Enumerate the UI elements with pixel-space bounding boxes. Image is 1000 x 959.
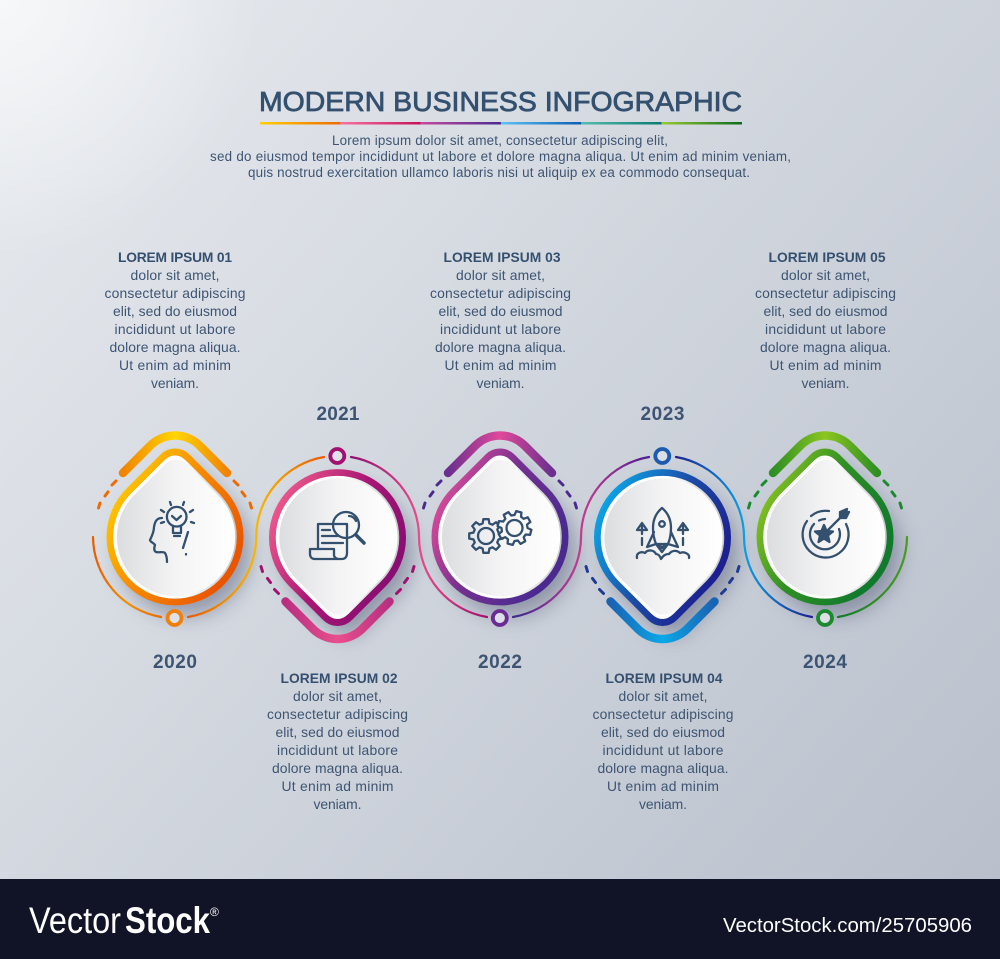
step 2: document search drop xyxy=(261,473,414,639)
footer logo: Vector xyxy=(29,900,121,941)
marker: 2022 node xyxy=(493,611,507,625)
step 4 ring xyxy=(598,473,728,622)
step 3 ring xyxy=(435,452,565,602)
title rainbow underline xyxy=(260,122,742,124)
intro text: sed do eiusmod tempor incididunt ut labore et dolore magna aliqua. Ut enim ad minim veniam, xyxy=(210,149,791,164)
step 5 dashes xyxy=(748,481,902,508)
text block: lorem ipsum 04: dolore magna aliqua. xyxy=(598,760,728,776)
step 2 ring xyxy=(272,473,402,622)
text block: lorem ipsum 01: consectetur adipiscing xyxy=(104,285,246,301)
text block: lorem ipsum 03: dolor sit amet, xyxy=(456,267,545,283)
step 5 top cap xyxy=(773,435,877,473)
step 4: rocket drop xyxy=(586,473,739,639)
text block: lorem ipsum 01: veniam. xyxy=(151,375,199,391)
step 2 bottom cap xyxy=(286,602,390,639)
text block: lorem ipsum 03: Ut enim ad minim xyxy=(444,357,556,373)
marker: 2021 node xyxy=(330,449,344,463)
text block: lorem ipsum 04: incididunt ut labore xyxy=(602,742,724,758)
text block: lorem ipsum 02: LOREM IPSUM 02 xyxy=(280,671,398,686)
step 4 bottom cap xyxy=(610,602,714,639)
step 5 plate xyxy=(763,456,887,599)
step 2 dashes xyxy=(261,566,414,594)
step 1 ring xyxy=(110,452,240,602)
step 1 dashes xyxy=(98,481,252,508)
text block: lorem ipsum 02: incididunt ut labore xyxy=(277,742,398,758)
text block: lorem ipsum 04: consectetur adipiscing xyxy=(592,706,734,722)
intro text xyxy=(210,133,791,180)
year 2023: 2023 xyxy=(640,404,684,425)
marker: 2023 node xyxy=(655,449,669,463)
text block: lorem ipsum 04 xyxy=(592,671,734,812)
footer logo: ® xyxy=(210,905,219,919)
text block: lorem ipsum 04: veniam. xyxy=(639,796,687,812)
step 3: gears drop xyxy=(424,435,576,602)
text block: lorem ipsum 01: incididunt ut labore xyxy=(114,321,236,337)
icon: document with magnifier xyxy=(310,512,364,559)
text block: lorem ipsum 05: veniam. xyxy=(802,375,850,391)
text block: lorem ipsum 01: dolor sit amet, xyxy=(130,267,220,283)
text block: lorem ipsum 01: elit, sed do eiusmod xyxy=(113,303,237,319)
text block: lorem ipsum 01: dolore magna aliqua. xyxy=(110,339,240,355)
icon: gears xyxy=(469,507,535,553)
text block: lorem ipsum 02: consectetur adipiscing xyxy=(267,706,408,722)
text block: lorem ipsum 04: elit, sed do eiusmod xyxy=(601,724,725,740)
footer logo xyxy=(29,900,219,941)
marker: 2024 node xyxy=(818,611,832,625)
text block: lorem ipsum 04: dolor sit amet, xyxy=(618,688,708,704)
text block: lorem ipsum 02 xyxy=(267,671,408,812)
year 2024: 2024 xyxy=(803,652,847,673)
text block: lorem ipsum 03: incididunt ut labore xyxy=(440,321,561,337)
step 4 shadow xyxy=(608,487,738,636)
step 3 top cap xyxy=(448,435,552,473)
text block: lorem ipsum 05: LOREM IPSUM 05 xyxy=(768,250,886,265)
step 3 dashes xyxy=(424,481,576,508)
text block: lorem ipsum 05 xyxy=(755,250,896,391)
step 1 plate xyxy=(113,456,237,599)
text block: lorem ipsum 02: veniam. xyxy=(314,796,362,812)
intro text: quis nostrud exercitation ullamco laboris nisi ut aliquip ex ea commodo consequat. xyxy=(248,165,750,180)
step 1 shadow xyxy=(120,466,250,616)
year 2022: 2022 xyxy=(478,652,522,673)
text block: lorem ipsum 02: dolore magna aliqua. xyxy=(272,760,403,776)
icon: target with arrow and star xyxy=(803,509,849,558)
text block: lorem ipsum 03: LOREM IPSUM 03 xyxy=(444,250,561,265)
step 2 plate xyxy=(276,476,399,618)
text block: lorem ipsum 01 xyxy=(104,250,246,391)
step 2 shadow xyxy=(282,487,412,636)
icon: rocket with clouds xyxy=(637,508,689,559)
step 5: target drop xyxy=(748,435,902,602)
text block: lorem ipsum 03: consectetur adipiscing xyxy=(430,285,571,301)
text block: lorem ipsum 04: LOREM IPSUM 04 xyxy=(606,671,723,686)
text block: lorem ipsum 05: dolore magna aliqua. xyxy=(760,339,891,355)
footer image id: VectorStock.com/25705906 xyxy=(723,915,972,937)
text block: lorem ipsum 05: Ut enim ad minim xyxy=(770,357,882,373)
timeline connecting arcs xyxy=(93,457,907,617)
footer bar xyxy=(0,879,1000,959)
text block: lorem ipsum 01: Ut enim ad minim xyxy=(119,357,231,373)
year 2020: 2020 xyxy=(153,652,197,673)
text block: lorem ipsum 04: Ut enim ad minim xyxy=(607,778,719,794)
text block: lorem ipsum 02: elit, sed do eiusmod xyxy=(276,724,400,740)
footer logo: Stock xyxy=(125,900,210,941)
intro text: Lorem ipsum dolor sit amet, consectetur adipiscing elit, xyxy=(332,133,668,148)
text block: lorem ipsum 02: Ut enim ad minim xyxy=(282,778,394,794)
step 3 plate xyxy=(438,456,562,599)
step 3 shadow xyxy=(445,466,575,616)
text block: lorem ipsum 05: elit, sed do eiusmod xyxy=(764,303,888,319)
text block: lorem ipsum 03: veniam. xyxy=(476,375,524,391)
step 5 shadow xyxy=(770,466,900,616)
text block: lorem ipsum 03 xyxy=(430,250,571,391)
text block: lorem ipsum 05: incididunt ut labore xyxy=(765,321,886,337)
text block: lorem ipsum 03: dolore magna aliqua. xyxy=(435,339,566,355)
icon: head with light bulb xyxy=(150,502,194,562)
step 4 dashes xyxy=(586,566,739,594)
step 1 top cap xyxy=(123,435,227,473)
text block: lorem ipsum 03: elit, sed do eiusmod xyxy=(438,303,562,319)
year 2021: 2021 xyxy=(316,404,360,425)
text block: lorem ipsum 05: dolor sit amet, xyxy=(781,267,870,283)
marker: 2020 node xyxy=(168,611,182,625)
text block: lorem ipsum 01: LOREM IPSUM 01 xyxy=(118,250,232,265)
title: MODERN BUSINESS INFOGRAPHIC xyxy=(259,86,742,117)
step 5 ring xyxy=(760,452,890,602)
step 4 plate xyxy=(601,476,724,618)
step 1: bulb drop xyxy=(98,435,252,602)
text block: lorem ipsum 02: dolor sit amet, xyxy=(293,688,382,704)
text block: lorem ipsum 05: consectetur adipiscing xyxy=(755,285,896,301)
